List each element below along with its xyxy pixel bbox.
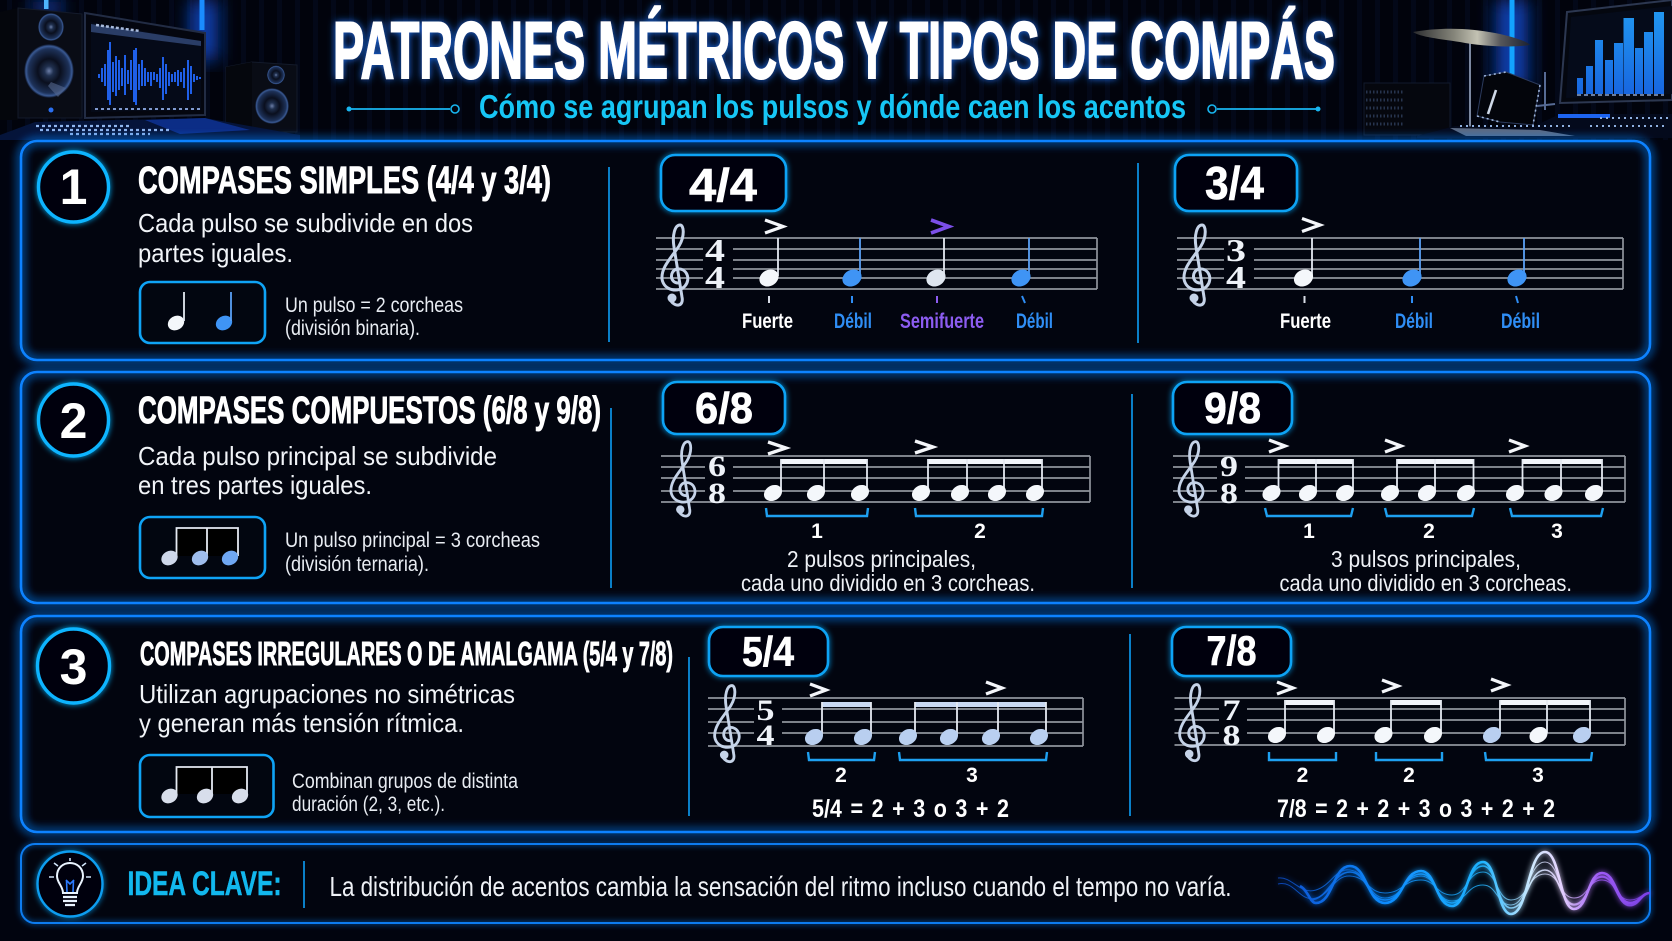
beat labels 3/4: Débil <box>1501 310 1540 333</box>
staff 3/4: 3 <box>1226 233 1246 268</box>
icon: light bulb <box>38 852 102 916</box>
note caption 3: duración (2, 3, etc.). <box>292 792 445 816</box>
waveform <box>1278 852 1650 914</box>
number badge 1 <box>38 152 108 222</box>
staff 3/4: 4 <box>1226 260 1246 295</box>
badge 9/8: 9/8 <box>1204 384 1261 433</box>
badge 7/8: 7/8 <box>1206 627 1256 674</box>
beat labels 3/4: Débil <box>1395 310 1433 333</box>
note caption 2: (división ternaria). <box>285 552 429 576</box>
beat labels 3/4 <box>1280 296 1540 333</box>
heading 2: COMPASES COMPUESTOS (6/8 y 9/8) <box>138 390 601 432</box>
beat labels 4/4: Fuerte <box>742 310 793 333</box>
number badge 3: 3 <box>60 639 87 695</box>
staff 7/8: 7 <box>1222 694 1240 727</box>
staff 5/4 <box>708 682 1083 787</box>
description 3 <box>139 679 515 738</box>
staff 7/8: 2 <box>1403 764 1415 787</box>
staff 9/8: 9 <box>1220 450 1238 483</box>
staff 4/4: 4 <box>705 260 725 295</box>
description 2: en tres partes iguales. <box>138 470 372 500</box>
staff 9/8: 1 <box>1303 520 1315 543</box>
panel 4: idea clave <box>21 844 1650 923</box>
idea clave label: IDEA CLAVE: <box>128 865 282 903</box>
treble clef <box>715 686 739 762</box>
staff 5/4: 3 <box>966 764 978 787</box>
badge 4/4: 4/4 <box>689 159 757 211</box>
beat labels 3/4: Fuerte <box>1280 310 1331 333</box>
treble clef <box>1179 442 1203 516</box>
caption 9/8: 3 pulsos principales, <box>1331 546 1521 572</box>
description 2: Cada pulso principal se subdivide <box>138 441 497 471</box>
beat labels 4/4: Débil <box>1016 310 1053 333</box>
treble clef <box>1180 685 1204 761</box>
description 1 <box>138 208 473 268</box>
badge 3/4 <box>1175 155 1297 211</box>
note caption 1: (división binaria). <box>285 316 420 340</box>
staff 9/8: 3 <box>1551 520 1563 543</box>
caption 6/8 <box>741 546 1035 596</box>
staff 9/8: 8 <box>1220 477 1238 510</box>
note caption 3: Combinan grupos de distinta <box>292 769 518 793</box>
staff 7/8 <box>1174 679 1625 787</box>
caption 9/8: cada uno dividido en 3 corcheas. <box>1280 570 1572 596</box>
formula 5/4: 5/4 = 2 + 3 o 3 + 2 <box>812 795 1009 823</box>
panel 2: compases compuestos <box>21 372 1650 603</box>
description 3: y generan más tensión rítmica. <box>139 708 464 738</box>
description 2 <box>138 441 497 500</box>
caption 6/8: 2 pulsos principales, <box>787 546 976 572</box>
badge 6/8: 6/8 <box>695 384 753 433</box>
number badge 2: 2 <box>60 393 87 449</box>
number badge 2 <box>38 384 108 456</box>
staff 5/4: 2 <box>835 764 847 787</box>
staff 4/4 <box>656 220 1097 305</box>
formula 7/8: 7/8 = 2 + 2 + 3 o 3 + 2 + 2 <box>1277 795 1555 823</box>
caption 6/8: cada uno dividido en 3 corcheas. <box>741 570 1035 596</box>
staff 6/8 <box>661 441 1090 543</box>
note box: irregular group <box>140 755 274 817</box>
caption 9/8 <box>1280 546 1572 596</box>
subtitle ornament right <box>1208 105 1320 113</box>
staff 6/8: 1 <box>811 520 823 543</box>
description 3: Utilizan agrupaciones no simétricas <box>139 679 515 709</box>
badge 3/4: 3/4 <box>1205 157 1264 209</box>
beat labels 4/4: Débil <box>834 310 872 333</box>
staff 7/8: 3 <box>1532 764 1544 787</box>
staff 3/4 <box>1177 218 1623 305</box>
treble clef <box>662 225 688 305</box>
staff 6/8: 6 <box>708 450 726 483</box>
subtitle ornament left <box>346 105 459 113</box>
note caption 2 <box>285 528 540 576</box>
note caption 1 <box>285 293 463 340</box>
note caption 1: Un pulso = 2 corcheas <box>285 293 463 317</box>
badge 5/4 <box>709 627 828 676</box>
panel 3: compases irregulares <box>21 616 1650 832</box>
staff 5/4: 4 <box>756 719 774 752</box>
staff 6/8: 8 <box>708 477 726 510</box>
beat labels 4/4: Semifuerte <box>900 310 984 333</box>
note caption 3 <box>292 769 518 816</box>
staff 4/4: 4 <box>705 233 725 268</box>
staff 6/8: 2 <box>974 520 986 543</box>
staff 9/8: 2 <box>1423 520 1435 543</box>
note box: three beamed notes <box>140 517 265 578</box>
badge 4/4 <box>661 155 786 211</box>
staff 5/4: 5 <box>756 694 774 727</box>
staff 7/8: 2 <box>1297 764 1308 787</box>
treble clef <box>671 442 695 516</box>
description 1: partes iguales. <box>138 238 293 268</box>
studio scene right: drum kit, amp and monitor <box>1364 0 1672 138</box>
subtitle: Cómo se agrupan los pulsos y dónde caen los acentos <box>479 88 1186 125</box>
note box: two quarter notes <box>140 282 265 343</box>
badge 7/8 <box>1172 627 1291 676</box>
heading 1: COMPASES SIMPLES (4/4 y 3/4) <box>138 160 551 202</box>
badge 6/8 <box>663 382 785 434</box>
staff 7/8: 8 <box>1222 719 1240 752</box>
number badge 1: 1 <box>60 159 87 215</box>
heading 3: COMPASES IRREGULARES O DE AMALGAMA (5/4 y 7/8) <box>140 635 673 672</box>
badge 9/8 <box>1173 382 1292 434</box>
studio scene left: speakers, monitor and console <box>0 0 300 140</box>
note caption 2: Un pulso principal = 3 corcheas <box>285 528 540 552</box>
treble clef <box>1184 225 1210 305</box>
key message: La distribución de acentos cambia la sensación del ritmo incluso cuando el tempo no varía. <box>330 871 1232 902</box>
number badge 3 <box>38 629 110 703</box>
beat labels 4/4 <box>742 296 1053 333</box>
description 1: Cada pulso se subdivide en dos <box>138 208 473 238</box>
staff 9/8 <box>1173 440 1625 543</box>
panel 1: compases simples <box>21 141 1650 360</box>
badge 5/4: 5/4 <box>742 628 795 675</box>
